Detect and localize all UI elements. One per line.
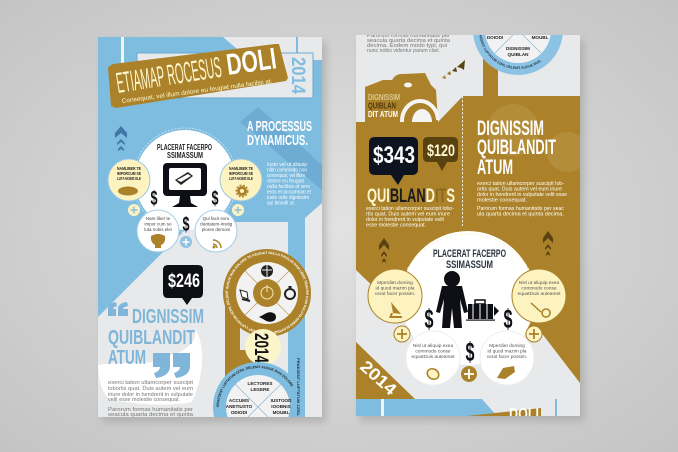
text block: left body: iriure dolor in hendrerit in vulputate: [108, 392, 193, 398]
callout: circle bottom right: id quod mazim pla: [488, 348, 527, 354]
text block: right body: [477, 181, 567, 218]
callout: yellow circle right: [220, 159, 262, 201]
callout: $120 bubble: [423, 137, 458, 171]
icon: camera with caption: QUIBLAN: [368, 102, 396, 110]
icon: plus buttons: [128, 204, 244, 248]
callout: white circle left: luta nobis elei: [144, 227, 172, 232]
dollar signs: $: [212, 188, 218, 210]
icon: person: [436, 271, 468, 328]
callout: yellow circle left: [108, 159, 150, 201]
callout: $246 bubble: [163, 265, 203, 305]
chart: bottom dial: IUSTOOD: [271, 398, 292, 403]
callout: circle top left: id quod mazim pla: [376, 286, 415, 292]
heading: a processus dynamicus: [247, 121, 312, 145]
callout: $120 bubble: $120: [427, 141, 455, 160]
callout: white circle left: [137, 210, 179, 252]
top text: nunc nobis videntur parum clari.: [367, 48, 440, 54]
chart: bottom dial: LECTORES: [248, 381, 272, 386]
icon: suitcase: [466, 300, 499, 321]
text block: left body: exerci tation ullamcorper suscipit lobo-: [366, 206, 454, 212]
gold field: [356, 96, 580, 383]
icon: arrows right: [543, 231, 553, 256]
callout: circle top right: Nisl ut aliquip exea: [519, 280, 559, 286]
text block: left body: dolor in hendrerit in vulputate velit: [366, 217, 445, 223]
panel: central circle right: PLACERAT FACERPO: [433, 248, 506, 260]
top text: [367, 35, 450, 53]
panel: left poster: [98, 37, 322, 417]
icon: laptop: [240, 290, 248, 299]
text block: left body: velit esse molestie consequat.: [108, 397, 180, 403]
callout: 2014 badge: 2014: [250, 333, 271, 363]
callout: 2014 badge: [245, 329, 281, 365]
callout: yellow circle left: NAMLIBER TE: [117, 166, 141, 171]
callout: yellow circle right: NAMLIBER TE: [229, 166, 253, 171]
dollar signs: [424, 304, 512, 367]
title banner: ETIAMAP ROCESUS: [114, 52, 224, 100]
icon: diagonal arrows: [442, 60, 465, 79]
callout: circle bottom right: Mperdiet doming: [489, 343, 525, 349]
chart: gold dial: PRAESENT LUPTATUM ZZRIL DELENIT AUGUE DUIS DOLORE TE FEUGAIT NULLA FACILISI NAM LIBER TEMPOR CUM SOLUTA NOBIS ELEIFEND: [226, 252, 308, 334]
top text: decima. Eodem modo typi, qui: [367, 43, 447, 49]
text block: left body: lobortis quat. Duis autem vel eum: [108, 386, 193, 392]
icon: plus buttons: [394, 326, 542, 382]
callout: circle top left: cerat facer possim.: [375, 291, 415, 297]
callout: yellow circle right: IMPORCUM SE: [229, 171, 253, 176]
heading: a processus dynamicus: A PROCESSUS: [247, 118, 312, 135]
panel: right poster: [356, 35, 580, 416]
text block: left body: [108, 380, 194, 418]
chart: top dial: PRAESENT LUPTATUM ZZRIL DELENIT AUGUE DUIS: [479, 35, 541, 69]
dollar signs: $: [150, 188, 158, 210]
text block: right blue: Iusto vel ut aliquip: [267, 162, 307, 168]
text block: right blue: nibh commodo non: [267, 168, 307, 174]
callout: circle top right: equatDuis auteamet: [518, 291, 561, 297]
icon: arrows: [115, 126, 127, 151]
icon: bulb: [259, 312, 276, 322]
title banner: DOLI: [224, 42, 278, 82]
chart: bottom dial: ANETIUSTO: [226, 404, 253, 409]
callout: white circle left: Nam liber te: [146, 216, 171, 221]
chart: bottom dial: ACCUMS: [229, 398, 249, 403]
chart: bottom dial: PRAESENT LUPTATUM ZZRIL DELENIT AUGUE DUIS DOLORE: [216, 366, 294, 407]
title banner: Consequat, vel illum dolore eu feugiat nulla facilisi at.: [121, 78, 273, 105]
heading: a processus dynamicus: DYNAMICUS.: [247, 132, 308, 149]
title banner: [108, 42, 288, 108]
panel: central circle: SSIMASSUM: [167, 151, 203, 160]
panel: central circle: [133, 128, 237, 236]
heading: dignissim quote: QUIBLANDIT: [108, 327, 195, 349]
callout: $246 bubble: $246: [168, 271, 200, 292]
text block: right body: ortis quat. Duis autem vel eum iriure: [477, 186, 562, 192]
text block: left body: Parorum formas humanitatis per: [108, 407, 193, 413]
callout: white circle left: impor cum so: [144, 222, 172, 226]
callout: $343 bubble: [369, 137, 418, 185]
icon: arrows left: [379, 238, 389, 263]
vertical strip label: PRAESENT LUPTATUM ZZRIL: [296, 358, 300, 417]
year label: 2014: [287, 57, 308, 94]
chart: gold dial: [223, 249, 311, 376]
icon: monitor: [163, 163, 207, 207]
white blob behind text: [98, 328, 202, 405]
callout: white circle right: Qui facit eoru: [203, 216, 230, 221]
top text: Parorum formas humanitatis per: [367, 33, 450, 39]
callout: circle bottom right: [480, 331, 534, 385]
dollar signs: $: [182, 214, 190, 236]
text block: right body: ula quarta decima et quinta decima.: [477, 212, 564, 218]
text block: left body: exerci tation ullamcorper suscipit: [108, 380, 194, 386]
callout: yellow circle right: LUTA NOBIS ELE: [229, 176, 253, 181]
callout: white circle right: [195, 210, 237, 252]
text block: left body: esse molestie consequat.: [366, 222, 426, 228]
dollar signs: $: [424, 304, 434, 334]
bottom band: [356, 399, 557, 423]
icon: globe: [261, 265, 273, 277]
callout: circle bottom left: Nisl ut aliquip exea: [413, 343, 453, 349]
corner: 2014 triangle: 2014: [356, 357, 401, 399]
chart: top dial: DIGNISSIM: [506, 46, 530, 51]
header ticket: [137, 53, 313, 98]
callout: $343 bubble: $343: [373, 142, 415, 169]
text block: right body: Parorum formas humanitatis per seac: [477, 206, 565, 212]
heading: dignissim: [477, 120, 556, 174]
callout: circle top left: [368, 269, 422, 323]
heading: dignissim quote: ATUM: [108, 347, 146, 369]
heading: dignissim: DIGNISSIM: [477, 117, 544, 140]
bottom band: DOLI: [509, 406, 539, 423]
text block: right body: dolor in hendrerit in vulputate velit esse: [477, 192, 567, 198]
text block: right blue: iusto odio dignissim: [267, 195, 309, 201]
icon: stopwatch: [285, 289, 295, 299]
text block: left body: seacula quarta decima et quinta: [108, 412, 193, 418]
callout: circle bottom left: [406, 331, 460, 385]
icon: camera with caption: [365, 73, 438, 122]
chart: bottom dial: IOOBNIS: [271, 404, 291, 409]
callout: yellow circle left: LUTA NOBIS ELE: [117, 176, 141, 181]
panel: central circle right: [401, 231, 535, 367]
callout: circle bottom right: cerat facer possim.: [487, 354, 527, 360]
chart: top dial: DOIODI: [487, 35, 503, 40]
dollar signs: [150, 190, 218, 232]
dollar signs: $: [504, 304, 512, 334]
callout: circle bottom left: commodo conse: [415, 348, 451, 354]
top text: seacula quarta decima et quinta: [367, 38, 450, 44]
chart: bottom dial: MOUBL: [273, 410, 290, 415]
dollar signs: $: [466, 337, 474, 367]
text block: left body: [366, 206, 454, 228]
text block: left body: rtis quat. Duis autem vel eum iriure: [366, 212, 450, 218]
chart: top dial: MOUBL: [532, 35, 549, 40]
text block: right body: exerci tation ullamcorper suscipit lob-: [477, 181, 564, 187]
panel: central circle right: SSIMASSUM: [446, 259, 493, 271]
heading: PLACERAT FACERPO: [157, 143, 212, 152]
text block: right blue: nulla facilisis at vero: [267, 184, 310, 190]
callout: circle top right: commodo conse: [521, 286, 557, 292]
icon: camera with caption: DIT ATUM: [368, 110, 398, 119]
chart: bottom dial: ODIODI: [231, 410, 247, 415]
callout: circle top right: [512, 269, 566, 323]
chart: top dial: QUIBLAN: [508, 52, 529, 57]
callout: white circle right: claritatem-insitig: [200, 222, 233, 226]
heading: dignissim quote: DIGNISSIM: [132, 306, 204, 328]
text block: right blue: [267, 162, 312, 206]
callout: white circle right: plores demoni: [202, 227, 230, 232]
text block: right body: molestie consequat.: [477, 198, 527, 204]
heading: dignissim quote: [108, 302, 204, 378]
heading: quiblandits: QUIBLANDITS: [367, 186, 455, 207]
heading: dignissim: ATUM: [477, 156, 513, 179]
chart: bottom dial: LEGERE: [251, 387, 269, 392]
text block: right blue: dolore eu feugiat: [267, 178, 305, 184]
callout: circle bottom left: equatDuis auteamet: [412, 354, 455, 360]
heading: dignissim: QUIBLANDIT: [477, 136, 556, 159]
icon: camera with caption: DIGNISSIM: [368, 93, 400, 102]
callout: yellow circle left: IMPORCUM SE: [117, 171, 141, 176]
text block: right blue: eros et accumsan et: [267, 190, 312, 196]
text block: right blue: consequat, vel illum: [267, 173, 305, 179]
callout: circle top left: Mperdiet doming: [377, 280, 413, 286]
chart: top dial: [473, 35, 563, 75]
text block: right blue: qui blandit ut.: [267, 200, 295, 206]
corner: 2014 triangle: [356, 342, 415, 399]
